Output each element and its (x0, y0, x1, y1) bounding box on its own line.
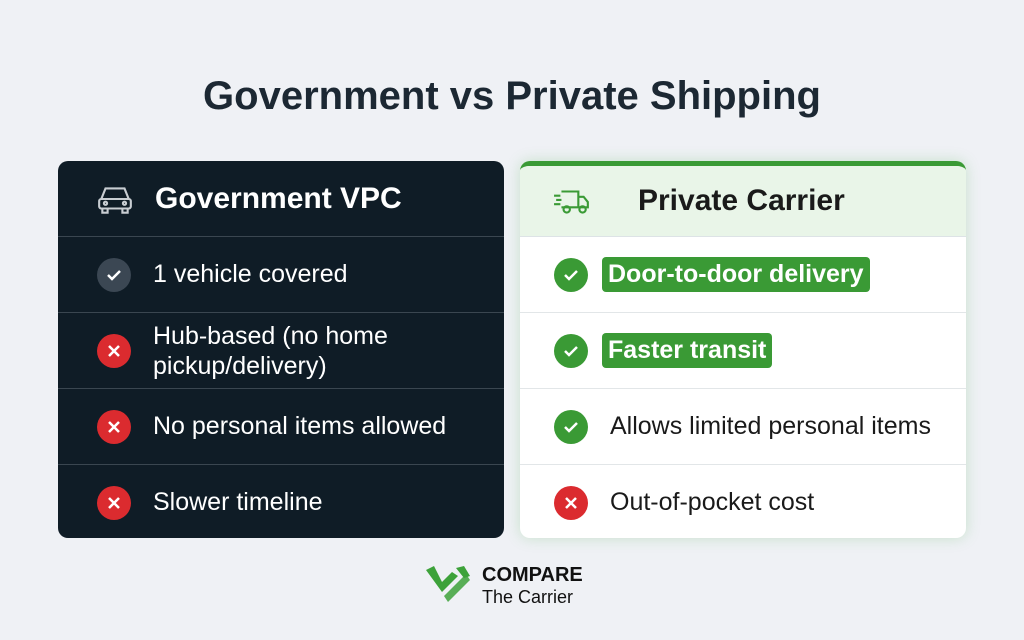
heading: private carrier (520, 166, 966, 237)
row: door-to-door: Door-to-door delivery (608, 260, 864, 288)
row: 1 vehicle (58, 237, 504, 313)
panel: private carrier (520, 161, 966, 538)
row: hub-based (58, 313, 504, 389)
row: no personal items: No personal items allowed (153, 412, 446, 440)
row: 1 vehicle: 1 vehicle covered (153, 260, 348, 288)
row: slower timeline: Slower timeline (153, 488, 323, 516)
heading: government VPC: Government VPC (155, 182, 402, 214)
row: no personal items (58, 389, 504, 465)
heading: government VPC (58, 161, 504, 237)
text: brand: The Carrier (482, 587, 573, 607)
title: Government vs Private Shipping (203, 74, 821, 118)
row: personal items: Allows limited personal items (610, 412, 931, 440)
text: brand: COMPARE (482, 564, 583, 586)
panel: government VPC (58, 161, 504, 538)
row: hub-based: Hub-based (no home (153, 322, 388, 350)
row: door-to-door (520, 237, 966, 313)
row: personal items (520, 389, 966, 465)
row: hub-based: pickup/delivery) (153, 352, 327, 380)
row: faster transit (520, 313, 966, 389)
row: slower timeline (97, 486, 323, 520)
logo (426, 564, 583, 607)
row: faster transit: Faster transit (608, 336, 766, 364)
text: brand (482, 564, 583, 607)
heading: private carrier: Private Carrier (638, 184, 845, 217)
icon: logo mark (426, 566, 470, 602)
row: cost (554, 486, 814, 520)
row: cost: Out-of-pocket cost (610, 488, 814, 516)
